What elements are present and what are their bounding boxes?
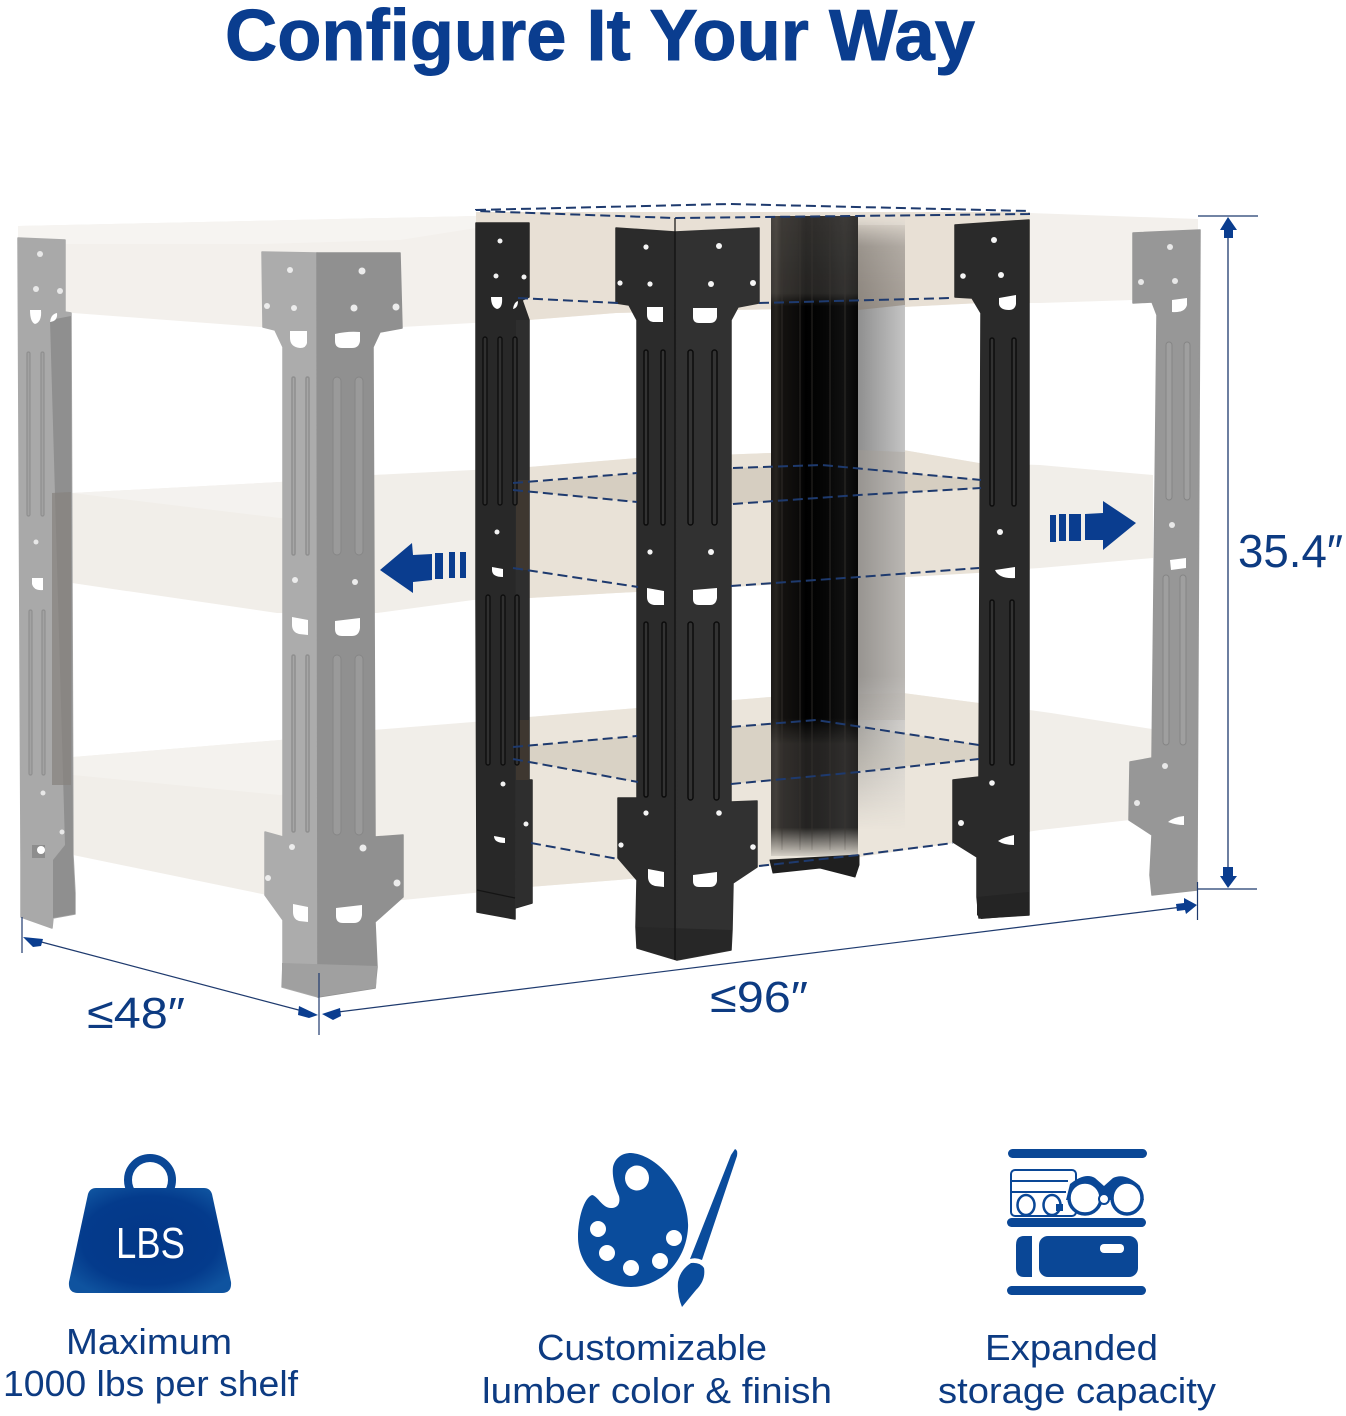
icon: palette and brush <box>578 1149 737 1307</box>
faded wood shelves <box>18 213 1198 900</box>
label: height: 35.4″ <box>1238 525 1343 577</box>
gray front-corner leg <box>262 252 403 997</box>
caption: customizable finish: lumber color & finish <box>482 1370 832 1411</box>
icon: weight <box>69 1158 231 1293</box>
gray back-left leg <box>18 238 75 928</box>
workbench illustration <box>18 204 1200 997</box>
label: depth: ≤48″ <box>87 989 185 1038</box>
feature: expanded storage <box>938 1149 1216 1411</box>
gray right leg <box>1129 230 1200 895</box>
width dimension 96 <box>322 882 1198 1022</box>
center shelf section in natural wood <box>476 212 1030 892</box>
depth dimension 48 <box>22 917 319 1038</box>
caption: weight capacity: Maximum <box>66 1321 232 1362</box>
icon: storage shelves <box>1007 1149 1147 1295</box>
label: width: ≤96″ <box>710 973 808 1022</box>
dashed outline of the extension frame <box>476 204 1029 866</box>
translucent center post, black layer <box>771 216 858 856</box>
caption: customizable finish: Customizable <box>537 1327 767 1368</box>
arrow: extend right <box>1050 501 1136 550</box>
arrow: extend left <box>380 543 466 593</box>
caption: weight capacity <box>3 1321 299 1404</box>
caption: customizable finish <box>482 1327 832 1411</box>
feature: weight capacity <box>3 1158 299 1404</box>
black right leg <box>953 220 1029 919</box>
center post foot <box>770 855 859 877</box>
caption: weight capacity: 1000 lbs per shelf <box>3 1363 299 1404</box>
translucent center post, gray layer <box>858 216 905 830</box>
height dimension 35.4 <box>1197 216 1343 889</box>
black left leg <box>476 223 532 919</box>
icon: weight: LBS <box>116 1219 185 1268</box>
black front-corner leg <box>616 218 759 960</box>
caption: expanded storage: storage capacity <box>938 1370 1216 1411</box>
caption: expanded storage: Expanded <box>985 1327 1158 1368</box>
feature: customizable finish <box>482 1149 832 1411</box>
caption: expanded storage <box>938 1327 1216 1411</box>
